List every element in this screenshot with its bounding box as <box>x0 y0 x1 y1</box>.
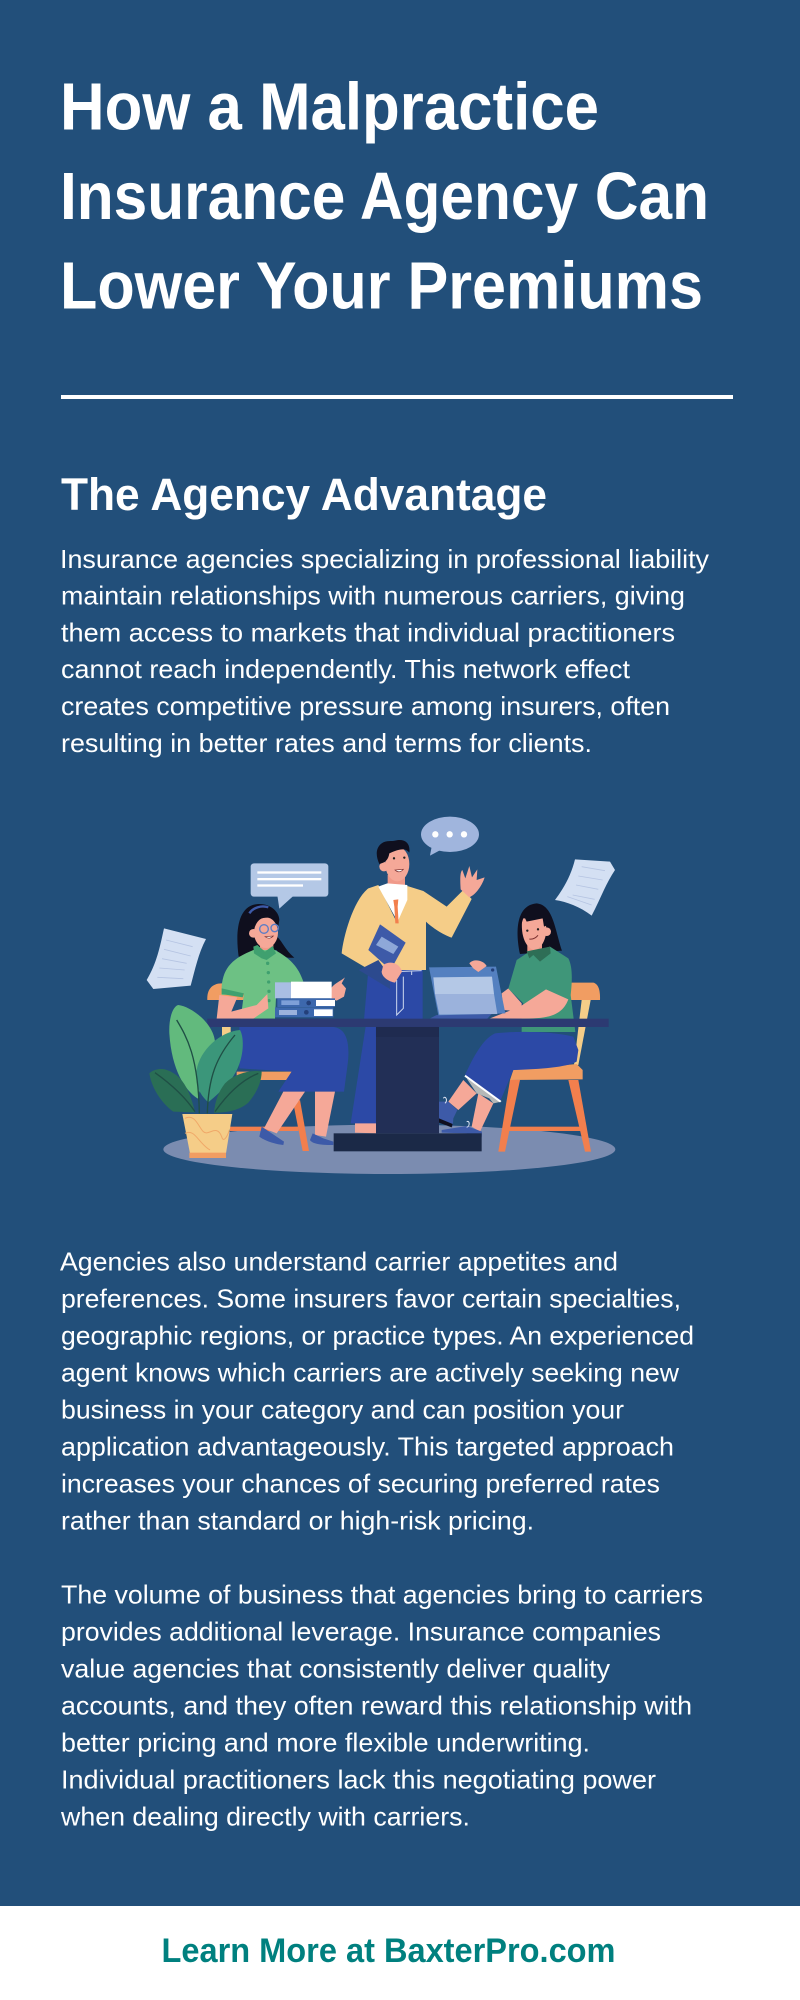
text block: intro paragraph: Insurance agencies specializing in professional liability <box>60 546 709 574</box>
text block: intro paragraph <box>60 546 709 758</box>
title <box>60 70 709 324</box>
left chair <box>207 983 309 1151</box>
speech bubble: dots <box>421 817 479 856</box>
heading: the agency advantage: The Agency Advantage <box>61 469 547 520</box>
text block: intro paragraph: maintain relationships with numerous carriers, giving <box>61 583 685 611</box>
text block: volume leverage paragraph: Individual practitioners lack this negotiating power <box>61 1766 656 1794</box>
woman on the left <box>217 904 348 1145</box>
title: Insurance Agency Can <box>60 159 709 234</box>
ground ellipse <box>163 1125 615 1174</box>
man standing <box>342 840 485 1133</box>
text block: carrier appetites paragraph: business in your category and can position your <box>61 1397 624 1425</box>
text block: carrier appetites paragraph: rather than standard or high-risk pricing. <box>61 1508 534 1536</box>
illustration: team meeting around a table <box>147 817 615 1174</box>
right chair <box>498 983 600 1152</box>
floating paper right <box>555 859 615 916</box>
text block: intro paragraph: them access to markets that individual practitioners <box>61 619 675 647</box>
woman on the right <box>439 903 578 1137</box>
text block: intro paragraph: resulting in better rates and terms for clients. <box>61 730 592 758</box>
footer bar <box>0 1906 800 2000</box>
stack of books and binders <box>275 982 335 1017</box>
text block: volume leverage paragraph: accounts, and they often reward this relationship with <box>61 1692 692 1720</box>
footer call to action: Learn More at BaxterPro.com <box>162 1932 616 1970</box>
text block: carrier appetites paragraph: geographic regions, or practice types. An experienced <box>61 1323 694 1351</box>
text block: carrier appetites paragraph: application advantageously. This targeted approach <box>61 1434 674 1462</box>
floating paper left <box>147 928 206 989</box>
title: How a Malpractice <box>60 70 599 144</box>
title: Lower Your Premiums <box>60 248 703 324</box>
potted plant <box>149 1005 262 1158</box>
text block: volume leverage paragraph: when dealing directly with carriers. <box>60 1803 470 1831</box>
text block: intro paragraph: creates competitive pressure among insurers, often <box>61 693 670 721</box>
text block: volume leverage paragraph <box>60 1581 703 1831</box>
text block: carrier appetites paragraph: Agencies also understand carrier appetites and <box>60 1249 618 1277</box>
speech bubble: lines <box>251 863 328 909</box>
text block: intro paragraph: cannot reach independently. This network effect <box>61 656 630 684</box>
text block: volume leverage paragraph: The volume of business that agencies bring to carriers <box>61 1581 703 1609</box>
text block: carrier appetites paragraph: increases your chances of securing preferred rates <box>61 1471 660 1499</box>
text block: volume leverage paragraph: value agencies that consistently deliver quality <box>61 1655 610 1683</box>
text block: volume leverage paragraph: better pricing and more flexible underwriting. <box>61 1729 590 1757</box>
text block: volume leverage paragraph: provides additional leverage. Insurance companies <box>61 1618 661 1646</box>
text block: carrier appetites paragraph: preferences. Some insurers favor certain specialties, <box>61 1286 681 1314</box>
text block: carrier appetites paragraph: agent knows which carriers are actively seeking new <box>61 1360 679 1388</box>
table <box>207 1019 609 1151</box>
laptop <box>429 960 505 1019</box>
text block: carrier appetites paragraph <box>60 1249 694 1536</box>
